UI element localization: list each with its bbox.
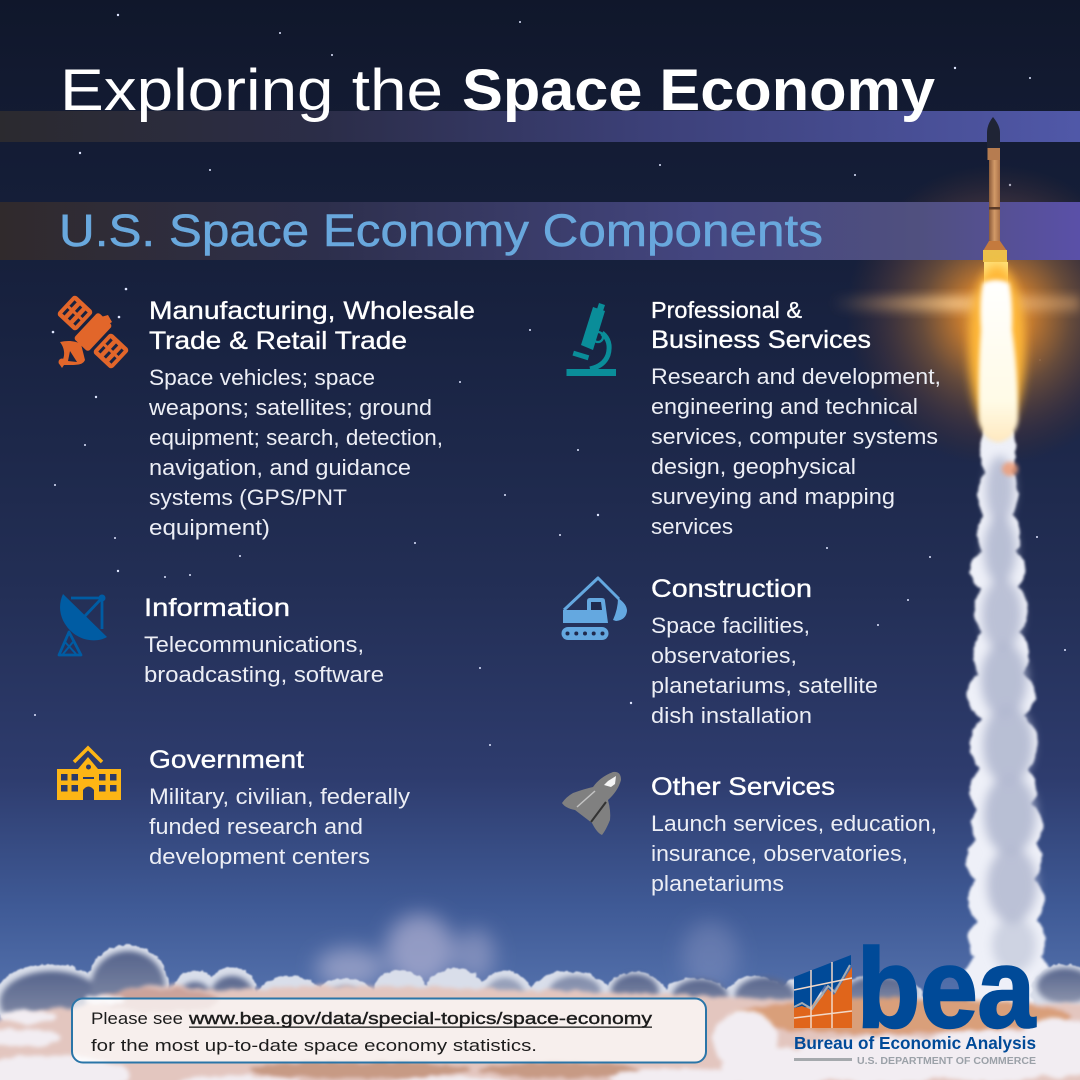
- back row shaded bodies: [0, 951, 1080, 1033]
- icon: space shuttle: [562, 772, 621, 835]
- text block: Military, civilian, federally: [149, 784, 410, 809]
- smoke plume: [962, 420, 1054, 1025]
- heading: Information: [144, 594, 290, 622]
- heading: Government: [149, 746, 304, 774]
- heading: [149, 297, 475, 355]
- title: [60, 58, 935, 123]
- text block: design, geophysical: [651, 454, 856, 479]
- logo: Bureau of Economic Analysis: Bureau of Economic Analysis: [794, 1033, 1036, 1053]
- icon: satellite: [56, 294, 130, 370]
- title: Exploring the: [60, 58, 443, 123]
- text block: systems (GPS/PNT: [149, 485, 347, 510]
- text block: services: [651, 514, 733, 539]
- callout: website note: www.bea.gov/data/special-topics/space-economy: [188, 1009, 653, 1028]
- text block: [651, 811, 937, 896]
- text block: equipment): [149, 515, 270, 540]
- text block: engineering and technical: [651, 394, 918, 419]
- callout: website note: Please see: [91, 1009, 183, 1028]
- cloud bank: [0, 945, 1080, 1080]
- heading: Professional &: [651, 297, 802, 323]
- icon: satellite dish: [59, 594, 107, 655]
- section band: [0, 202, 1080, 260]
- callout: website note: for the most up-to-date space economy statistics.: [91, 1036, 537, 1055]
- section heading: U.S. Space Economy Components: [59, 205, 823, 256]
- text block: surveying and mapping: [651, 484, 895, 509]
- panel: professional and business services: [566, 297, 941, 539]
- logo: Bureau of Economic Analysis: [794, 926, 1036, 1067]
- text block: funded research and: [149, 814, 363, 839]
- text block: planetariums: [651, 871, 784, 896]
- text block: Research and development,: [651, 364, 941, 389]
- rocket flame: [969, 265, 1025, 442]
- front white puffs: [0, 995, 1080, 1080]
- text block: [144, 632, 384, 687]
- heading: Manufacturing, Wholesale: [149, 297, 475, 325]
- text block: [651, 364, 941, 539]
- heading: Trade & Retail Trade: [149, 327, 407, 355]
- text block: Launch services, education,: [651, 811, 937, 836]
- rocket: [983, 117, 1008, 286]
- icon: chart mark: [794, 955, 852, 1028]
- title: Space Economy: [462, 58, 935, 123]
- heading: Other Services: [651, 773, 835, 801]
- pink mid layer: [0, 985, 1080, 1080]
- stars: [34, 14, 1066, 746]
- text block: services, computer systems: [651, 424, 938, 449]
- text block: Space vehicles; space: [149, 365, 375, 390]
- text block: navigation, and guidance: [149, 455, 411, 480]
- logo: Bureau of Economic Analysis: bea: [857, 926, 1036, 1051]
- heading: [651, 297, 871, 354]
- panel: information: [59, 594, 384, 687]
- text block: insurance, observatories,: [651, 841, 908, 866]
- text block: broadcasting, software: [144, 662, 384, 687]
- text block: Telecommunications,: [144, 632, 364, 657]
- back row white rims: [0, 945, 1080, 1036]
- text block: [651, 613, 878, 728]
- text block: Space facilities,: [651, 613, 810, 638]
- panel: other services: [562, 772, 937, 896]
- icon: microscope: [566, 303, 616, 376]
- panel: construction: [562, 575, 878, 728]
- heading: Construction: [651, 575, 812, 603]
- text block: [149, 784, 410, 869]
- text block: weapons; satellites; ground: [148, 395, 432, 420]
- haze plumes above the clouds: [316, 914, 738, 989]
- text block: planetariums, satellite: [651, 673, 878, 698]
- text block: development centers: [149, 844, 370, 869]
- rocket exhaust glow: [830, 165, 1080, 465]
- icon: government building: [57, 748, 121, 800]
- text block: observatories,: [651, 643, 797, 668]
- panel: manufacturing, wholesale and retail trade: [56, 294, 475, 540]
- heading: Business Services: [651, 326, 871, 354]
- panel: government: [57, 746, 410, 869]
- text block: [148, 365, 443, 540]
- callout: website note: [72, 998, 706, 1062]
- icon: excavator: [562, 578, 627, 640]
- text block: dish installation: [651, 703, 812, 728]
- logo: Bureau of Economic Analysis: U.S. DEPARTMENT OF COMMERCE: [857, 1055, 1036, 1067]
- title band: [0, 111, 1080, 142]
- text block: equipment; search, detection,: [149, 425, 443, 450]
